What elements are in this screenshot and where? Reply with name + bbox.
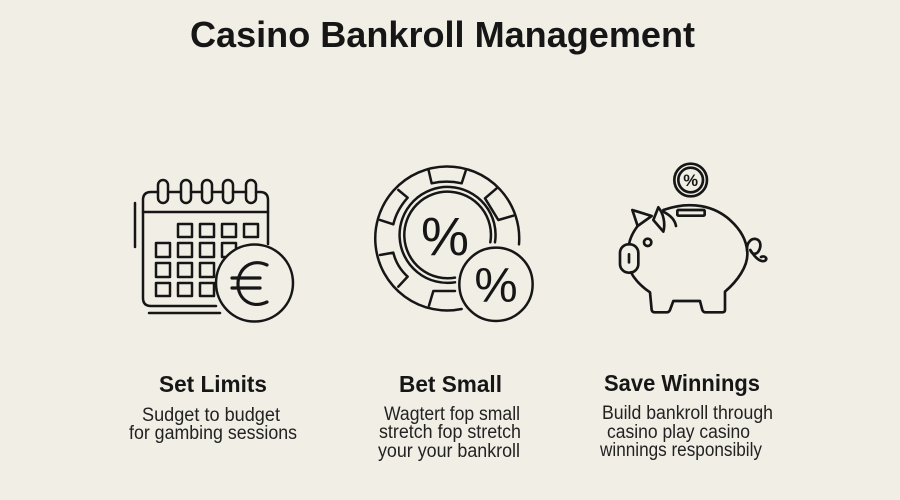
icon: calendar with euro coin (135, 180, 293, 322)
text: set limits description: for gambing sessions (129, 423, 297, 444)
text: set limits description (129, 405, 297, 444)
heading: set limits: Set Limits (159, 371, 267, 397)
icon: small percent coin: % (474, 259, 518, 313)
column: save winnings (599, 370, 773, 461)
icon: euro coin (216, 244, 293, 322)
text: bet small description: Wagtert fop small (384, 404, 520, 425)
heading: bet small: Bet Small (399, 371, 502, 397)
text: save winnings description: Build bankroll through (602, 403, 773, 424)
column: set limits (129, 371, 297, 444)
heading: save winnings: Save Winnings (604, 370, 760, 396)
text: save winnings description: casino play casino (607, 422, 750, 443)
icon: coin: % (683, 171, 698, 190)
icon: casino chip with percent signs (375, 166, 533, 321)
text: save winnings description: winnings responsibily (599, 440, 762, 461)
text: set limits description: Sudget to budget (142, 405, 281, 426)
icon: small percent coin (459, 248, 533, 321)
title: Casino Bankroll Management (190, 14, 695, 55)
text: bet small description: stretch fop stretch (379, 422, 521, 443)
text: bet small description (378, 404, 521, 462)
column: bet small (378, 371, 521, 462)
text: percent in chip: % (421, 207, 469, 267)
text: bet small description: your your bankroll (378, 441, 520, 462)
icon: piggy bank with coin (620, 164, 766, 312)
text: save winnings description (599, 403, 773, 461)
icon: coin (674, 164, 707, 196)
